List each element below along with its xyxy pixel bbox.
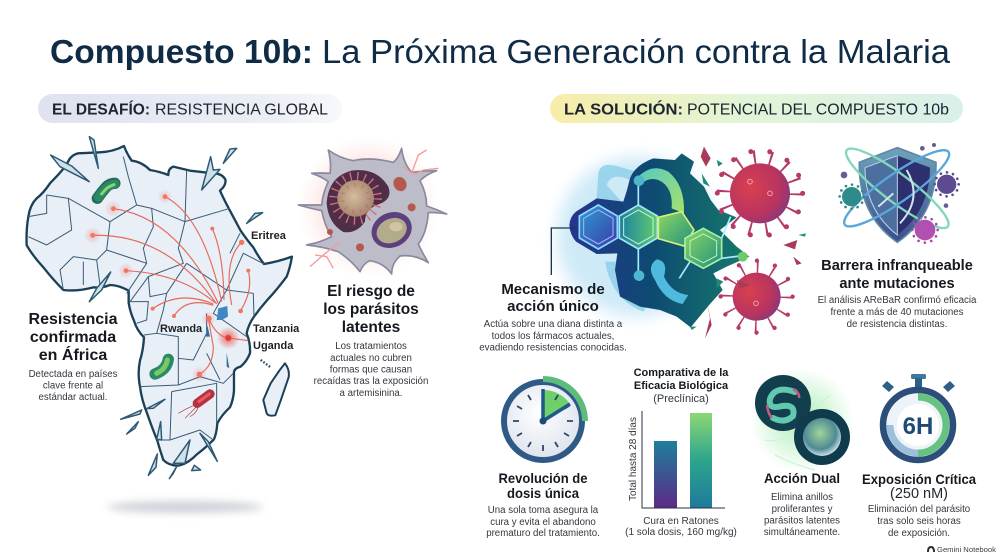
label: Eritrea: Eritrea <box>251 230 287 242</box>
text block: barrera: Barrera infranqueable <box>821 258 973 274</box>
text block: resistencia confirmada <box>29 311 118 403</box>
icon: molecule and viruses <box>551 147 806 338</box>
molecule rings <box>579 205 617 249</box>
text block: dosis única <box>486 470 600 539</box>
icon: infected cell <box>297 135 447 278</box>
cracks and shards <box>51 137 263 479</box>
text block: acción dual <box>764 470 840 538</box>
country borders <box>28 157 264 440</box>
text block: parásitos latentes: formas que causan <box>330 364 412 376</box>
text block: acción dual: proliferantes y <box>772 504 833 515</box>
resistance spread arrows <box>93 197 250 374</box>
text block: parásitos latentes: El riesgo de <box>327 283 415 300</box>
text block: dosis única: Una sola toma asegura la <box>488 505 599 516</box>
purple virus <box>935 172 959 196</box>
parasite vacuole <box>327 170 389 232</box>
spiky parasite <box>334 176 378 220</box>
text block: exposición crítica: Eliminación del parásito <box>868 504 970 515</box>
text block: barrera: de resistencia distintas. <box>847 319 947 330</box>
cell membrane <box>298 148 447 274</box>
label: Uganda: Uganda <box>253 340 294 352</box>
text block: resistencia confirmada: clave frente al <box>43 380 103 392</box>
text block: resistencia confirmada: en África <box>39 345 107 364</box>
hotspot dots <box>90 194 250 377</box>
text block: mecanismo: todos los fármacos actuales, <box>492 331 614 342</box>
6H: 6H <box>903 413 933 440</box>
text block: exposición crítica: de exposición. <box>888 528 950 539</box>
ring parasite circle <box>755 375 811 431</box>
magenta virus <box>912 217 938 243</box>
fragments <box>690 147 806 338</box>
continent outline <box>27 146 292 466</box>
text block: exposición crítica: (250 nM) <box>890 486 948 502</box>
top green arc <box>640 168 684 213</box>
red inclusions <box>327 174 416 251</box>
molecule bonds and atoms <box>638 185 740 278</box>
icon: dual action <box>750 368 854 472</box>
text block: acción dual: simultáneamente. <box>764 527 840 538</box>
teal virus <box>840 185 864 209</box>
latent parasite circle <box>794 409 850 465</box>
text block: parásitos latentes: recaídas tras la exposición <box>314 376 428 387</box>
droplet <box>651 259 688 304</box>
text block: barrera <box>818 258 977 330</box>
text block: dosis única: cura y evita el abandono <box>490 517 596 528</box>
heading pill: la solución <box>550 94 963 123</box>
text block: parásitos latentes: a artemisinina. <box>340 388 402 399</box>
icon: clock <box>504 379 585 460</box>
title <box>50 34 950 71</box>
bacteria: green south <box>155 359 168 374</box>
islands <box>261 360 271 367</box>
text block: mecanismo: acción único <box>507 298 599 315</box>
heading pill: el desafío: EL DESAFÍO: <box>52 102 150 118</box>
pale blue ribbons <box>597 165 653 312</box>
bacteria: red <box>178 394 210 418</box>
text block: acción dual: Elimina anillos <box>771 492 833 503</box>
pointer line <box>551 228 575 275</box>
latent parasite <box>366 206 418 254</box>
text block: resistencia confirmada: confirmada <box>30 329 116 346</box>
text block: mecanismo <box>479 281 627 354</box>
text block: barrera: frente a más de 40 mutaciones <box>830 307 964 318</box>
chart title <box>634 367 729 405</box>
text block: parásitos latentes: los parásitos <box>323 301 419 318</box>
text block: parásitos latentes <box>314 283 428 399</box>
title: La Próxima Generación contra la Malaria <box>322 34 950 71</box>
text block: acción dual: parásitos latentes <box>764 516 840 526</box>
text block: dosis única: dosis única <box>507 485 579 501</box>
text block: mecanismo: evadiendo resistencias conocidas. <box>479 342 627 354</box>
map of Africa <box>27 137 292 479</box>
rwanda highlight <box>217 306 228 320</box>
small particles <box>841 143 948 208</box>
heading pill: el desafío: RESISTENCIA GLOBAL <box>155 102 328 118</box>
text block: resistencia confirmada: Resistencia <box>29 311 118 328</box>
x axis label: Cura en Ratones <box>643 516 719 527</box>
text block: resistencia confirmada: estándar actual. <box>39 392 107 403</box>
text block: parásitos latentes: Los tratamientos <box>335 341 407 352</box>
text block: exposición crítica <box>862 471 976 539</box>
watermark: Gemini Notebook <box>937 545 996 554</box>
axes <box>642 411 725 508</box>
text block: resistencia confirmada: Detectada en países <box>29 369 118 380</box>
title: Compuesto 10b: <box>50 34 313 71</box>
text block: exposición crítica: tras solo seis horas <box>877 516 961 527</box>
heading pill: la solución: LA SOLUCIÓN: <box>564 100 683 118</box>
chart title: Eficacia Biológica <box>634 380 729 392</box>
red virus bottom <box>721 261 793 333</box>
madagascar <box>263 363 289 416</box>
label: Rwanda: Rwanda <box>160 323 203 335</box>
heading pill: la solución: POTENCIAL DEL COMPUESTO 10b <box>687 102 949 118</box>
soft glow <box>557 157 717 317</box>
molecule backing <box>569 153 749 327</box>
text block: dosis única: Revolución de <box>498 470 588 486</box>
pink glow <box>297 135 440 278</box>
label: Tanzania: Tanzania <box>253 323 300 335</box>
icon: shield with orbits <box>837 139 959 243</box>
icon: stopwatch <box>882 374 955 460</box>
text block: barrera: El análisis AReBaR confirmó eficacia <box>818 295 977 306</box>
bacteria: green north <box>97 183 115 198</box>
text block: mecanismo: Actúa sobre una diana distinta a <box>484 319 623 330</box>
red hotspots <box>84 189 240 382</box>
bar chart <box>625 367 737 538</box>
shield <box>859 148 936 242</box>
text block: parásitos latentes: actuales no cubren <box>330 353 412 364</box>
red virus top <box>717 151 803 236</box>
x axis label <box>625 516 737 538</box>
shield cross strokes <box>878 170 914 223</box>
lake <box>206 325 229 368</box>
y axis label: Total hasta 28 días <box>628 417 639 501</box>
text block: dosis única: prematuro del tratamiento. <box>486 528 600 539</box>
chart title: Comparativa de la <box>634 367 729 379</box>
bar: control <box>654 441 677 508</box>
bar: compuesto 10b <box>690 413 712 508</box>
x axis label: (1 sola dosis, 160 mg/kg) <box>625 527 737 538</box>
heading pill: el desafío <box>38 94 342 123</box>
orbits <box>837 139 957 238</box>
chart title: (Preclínica) <box>653 393 709 405</box>
cracks <box>310 150 438 268</box>
text block: barrera: ante mutaciones <box>839 276 955 292</box>
text block: exposición crítica: Exposición Crítica <box>862 471 976 487</box>
map shadow <box>107 501 263 513</box>
text block: acción dual: Acción Dual <box>764 470 840 486</box>
text block: parásitos latentes: latentes <box>342 319 400 336</box>
text block: mecanismo: Mecanismo de <box>501 281 605 298</box>
